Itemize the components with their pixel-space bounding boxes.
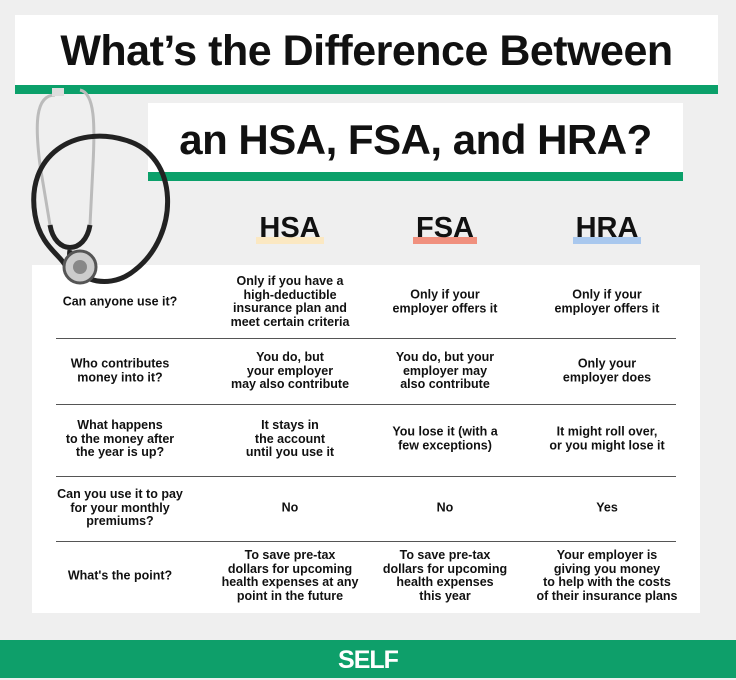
row 1 — [63, 274, 660, 328]
comparison table: money into it? — [77, 370, 163, 384]
row 4 — [57, 487, 618, 528]
comparison table: may also contribute — [231, 377, 349, 391]
comparison table: No — [437, 500, 453, 514]
comparison table: employer does — [563, 370, 651, 384]
comparison table: few exceptions) — [398, 438, 492, 452]
header: HSA: HSA — [259, 212, 321, 244]
comparison table — [32, 265, 700, 613]
comparison table: giving you money — [554, 562, 660, 576]
comparison table: You lose it (with a — [392, 424, 498, 438]
comparison table: this year — [419, 588, 471, 602]
comparison table: You do, but — [256, 350, 324, 364]
comparison table: for your monthly — [70, 500, 170, 514]
comparison table: employer offers it — [393, 301, 497, 315]
comparison table: To save pre-tax — [245, 548, 335, 562]
comparison table: meet certain criteria — [231, 314, 349, 328]
comparison table: What's the point? — [68, 568, 172, 582]
comparison table: also contribute — [400, 377, 490, 391]
comparison table: the year is up? — [76, 445, 164, 459]
comparison table: Only if your — [410, 288, 480, 302]
comparison table: Can anyone use it? — [63, 294, 177, 308]
comparison table: employer may — [403, 363, 487, 377]
comparison table: It stays in — [261, 418, 319, 432]
comparison table: Who contributes — [71, 356, 169, 370]
comparison table: to the money after — [66, 431, 174, 445]
comparison table: your employer — [247, 363, 333, 377]
comparison table: You do, but your — [396, 350, 494, 364]
row 2 — [70, 350, 651, 391]
comparison table: To save pre-tax — [400, 548, 490, 562]
icon: stethoscope — [31, 88, 170, 284]
title line 2: an HSA, FSA, and HRA? — [179, 116, 652, 163]
comparison table: What happens — [77, 418, 163, 432]
comparison table: dollars for upcoming — [383, 562, 507, 576]
comparison table: dollars for upcoming — [228, 562, 352, 576]
comparison table: Yes — [596, 500, 618, 514]
comparison table: Only your — [578, 356, 636, 370]
title line 1 — [15, 15, 718, 94]
comparison table: Your employer is — [557, 548, 657, 562]
comparison table: the account — [255, 431, 325, 445]
comparison table: of their insurance plans — [536, 588, 678, 602]
title line 2 — [148, 103, 683, 181]
comparison table: Only if you have a — [236, 274, 343, 288]
row 5 — [68, 548, 678, 602]
comparison table: until you use it — [246, 445, 334, 459]
comparison table: point in the future — [237, 588, 343, 602]
comparison table: employer offers it — [555, 301, 659, 315]
comparison table: to help with the costs — [543, 575, 671, 589]
comparison table: premiums? — [86, 514, 154, 528]
comparison table: health expenses at any — [222, 575, 358, 589]
footer: SELF logo — [0, 640, 736, 678]
comparison table: It might roll over, — [557, 424, 657, 438]
comparison table: insurance plan and — [233, 301, 347, 315]
comparison table: high-deductible — [243, 288, 337, 302]
comparison table: or you might lose it — [549, 438, 665, 452]
header: HRA: HRA — [576, 212, 638, 244]
row 3 — [66, 418, 665, 459]
footer: SELF logo: SELF — [338, 646, 398, 674]
comparison table: Only if your — [572, 288, 642, 302]
title line 1: What’s the Difference Between — [60, 27, 673, 75]
comparison table: health expenses — [396, 575, 494, 589]
comparison table: No — [282, 500, 298, 514]
header: FSA: FSA — [416, 212, 474, 244]
comparison table: Can you use it to pay — [57, 487, 183, 501]
